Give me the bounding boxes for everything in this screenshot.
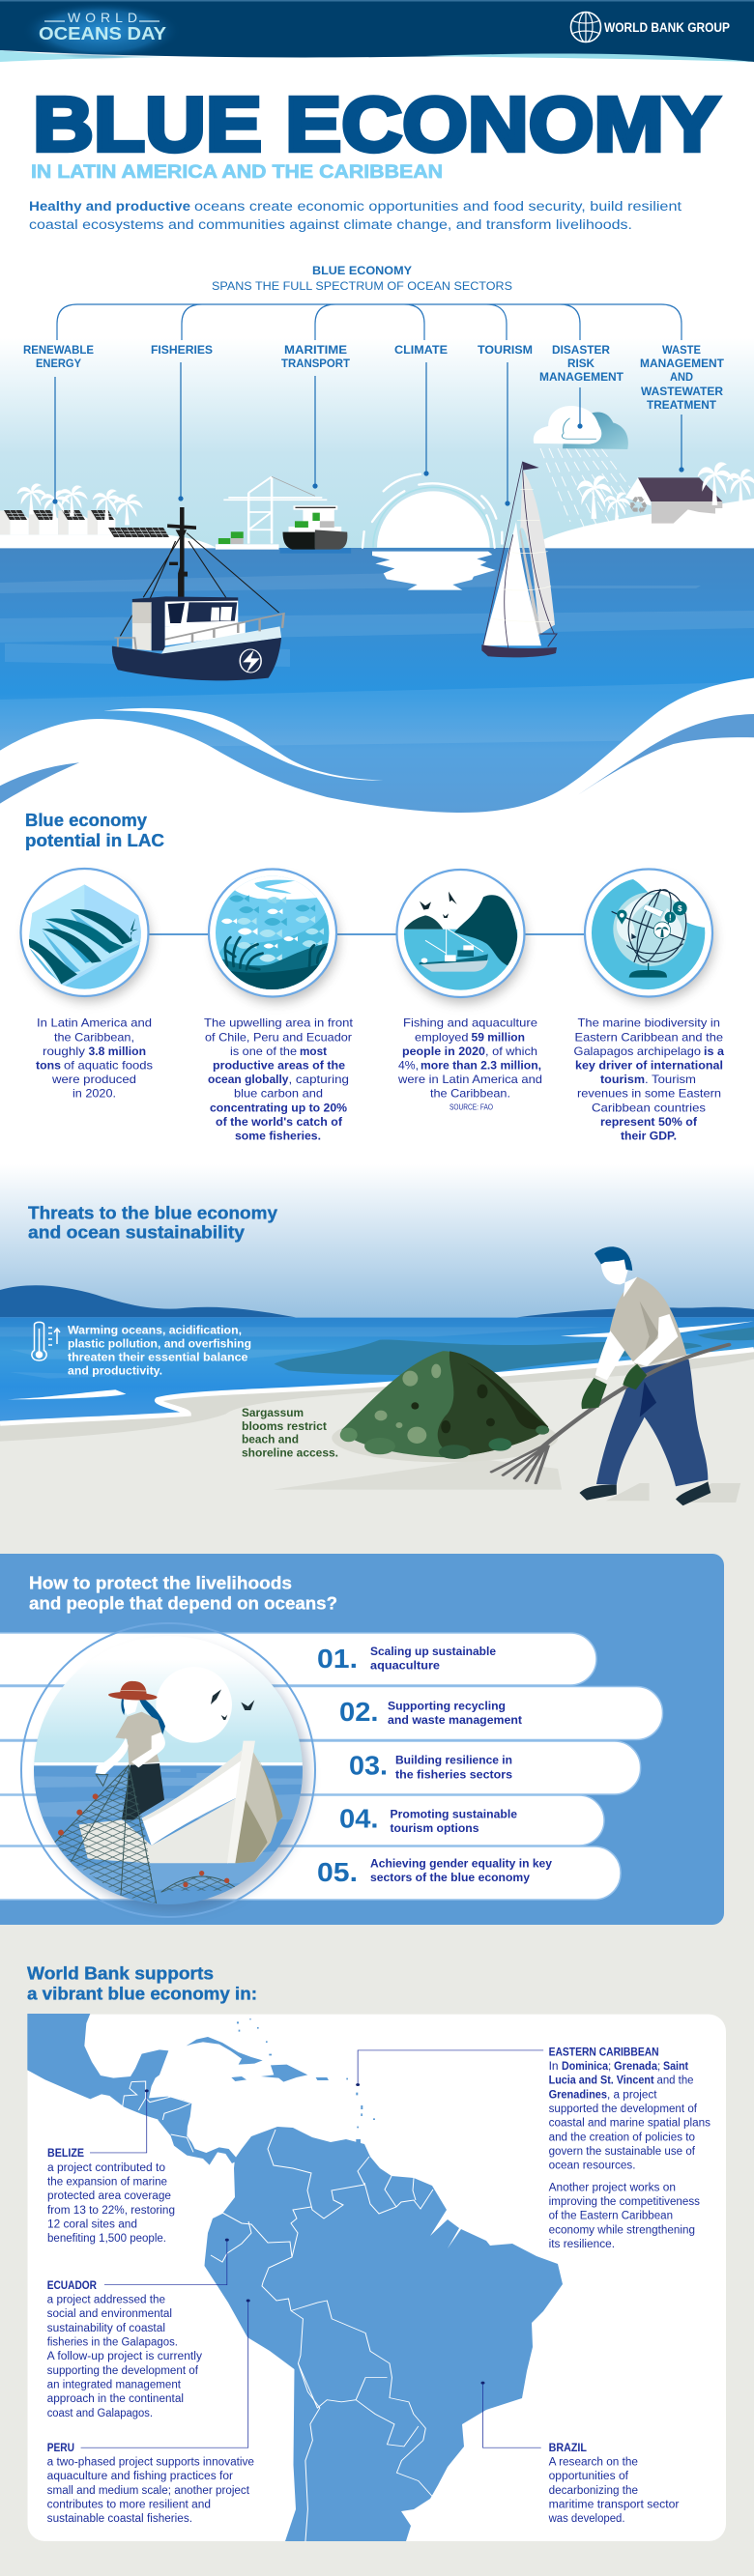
man raking seaweed bbox=[491, 1246, 740, 1505]
text: Belize: BELIZE bbox=[47, 2148, 84, 2160]
left beach and houses bbox=[0, 510, 217, 548]
text: Eastern Caribbean: Grenadines bbox=[549, 2089, 607, 2101]
sargassum text: shoreline access. bbox=[242, 1445, 338, 1459]
option 02: Supporting recycling bbox=[388, 1701, 506, 1712]
text: Peru: aquaculture and fishing practices for bbox=[47, 2471, 233, 2482]
port crane bbox=[223, 476, 327, 544]
option 01: aquaculture bbox=[370, 1661, 440, 1673]
option 01 bbox=[317, 1644, 496, 1674]
boat bbox=[79, 1741, 283, 1863]
sector labels bbox=[23, 345, 724, 412]
text: Belize: 12 coral sites and bbox=[47, 2218, 137, 2230]
text: Eastern Caribbean: Grenada bbox=[614, 2061, 658, 2073]
text: Ecuador: coast and Galapagos. bbox=[47, 2408, 153, 2419]
text: Peru: PERU bbox=[47, 2443, 74, 2454]
text: Eastern Caribbean bbox=[549, 2046, 710, 2250]
text: Brazil: BRAZIL bbox=[549, 2443, 587, 2454]
text: Eastern Caribbean: EASTERN CARIBBEAN bbox=[549, 2046, 659, 2058]
palm trees bbox=[17, 463, 754, 525]
heading: potential: Blue economy bbox=[25, 811, 147, 830]
stat text: aquatic foods: in 2020. bbox=[72, 1087, 116, 1101]
sector labels: AND bbox=[670, 372, 693, 384]
threats text: plastic pollution, and overfishing bbox=[68, 1337, 251, 1351]
stat text: upwelling: most bbox=[300, 1045, 327, 1058]
text: Peru: a two-phased project supports innovative bbox=[47, 2456, 254, 2468]
heading: World Bank: World Bank supports bbox=[27, 1964, 214, 1984]
neck and face bbox=[601, 1259, 637, 1298]
ring bbox=[21, 1623, 315, 1917]
text: Eastern Caribbean: , a project bbox=[607, 2089, 657, 2101]
text: Ecuador: an integrated management bbox=[47, 2379, 182, 2390]
stat text: upwelling: some fisheries. bbox=[235, 1130, 321, 1143]
stat text: tourism bbox=[574, 1016, 724, 1143]
map: Mexico and Central America bbox=[27, 2014, 375, 2165]
text: Brazil: A research on the bbox=[549, 2456, 638, 2468]
title: BLUE ECONOMY bbox=[33, 81, 720, 167]
shoreline and coastal illustration bbox=[0, 476, 754, 554]
stat text: tourism: their GDP. bbox=[621, 1130, 677, 1143]
logo: World Oceans Day: WORLD bbox=[68, 10, 137, 25]
map: country borders bbox=[123, 2081, 433, 2541]
sector labels: FISHERIES bbox=[151, 345, 213, 357]
circle 2: marine life bbox=[209, 870, 338, 1002]
text: Belize: the expansion of marine bbox=[47, 2176, 167, 2188]
map: South America bbox=[205, 2127, 563, 2541]
sector heading bbox=[212, 264, 512, 293]
stat text: aquatic foods: 3.8 million bbox=[89, 1045, 146, 1058]
text: Eastern Caribbean: In bbox=[549, 2061, 559, 2073]
text: Eastern Caribbean: supported the development of bbox=[549, 2104, 698, 2115]
option 03: the fisheries sectors bbox=[395, 1769, 512, 1781]
threats text: and productivity. bbox=[68, 1363, 162, 1377]
stat text: tourism: Caribbean countries bbox=[592, 1101, 706, 1114]
lower page background bbox=[0, 1449, 754, 2576]
fishing boat bbox=[112, 507, 284, 680]
text: Eastern Caribbean: and the creation of policies to bbox=[549, 2132, 695, 2143]
sector labels: WASTEWATER bbox=[641, 386, 724, 398]
stat text: aquatic foods: In Latin America and bbox=[37, 1016, 152, 1030]
circle 1: fish bbox=[21, 869, 150, 1001]
option 04: 04. bbox=[339, 1804, 379, 1834]
sector labels: CLIMATE bbox=[394, 345, 448, 357]
stat text: employment: employed bbox=[415, 1030, 468, 1044]
heading: World Bank: a vibrant blue economy in: bbox=[27, 1985, 257, 2004]
sector heading: BLUE ECONOMY bbox=[312, 264, 412, 277]
option 05 bbox=[317, 1857, 553, 1887]
panel: how to protect bbox=[0, 1554, 724, 1925]
right hill bbox=[543, 499, 754, 548]
intro text: Healthy and productive bbox=[29, 199, 191, 214]
text: Belize bbox=[47, 2148, 175, 2245]
logo: World Bank Group: WORLD BANK GROUP bbox=[604, 20, 730, 35]
sector labels: TREATMENT bbox=[647, 400, 716, 412]
stat text: aquatic foods bbox=[36, 1016, 153, 1101]
intro text: oceans create economic opportunities and food security, build resilient bbox=[194, 199, 682, 214]
text: Eastern Caribbean: govern the sustainable use of bbox=[549, 2146, 696, 2158]
illustration: woman with net bbox=[29, 1633, 309, 1910]
pants bbox=[596, 1360, 708, 1486]
text: Peru bbox=[47, 2443, 254, 2525]
sector labels: ENERGY bbox=[36, 358, 81, 370]
text: Brazil bbox=[548, 2443, 680, 2525]
text: Brazil: was developed. bbox=[548, 2513, 624, 2525]
heading: potential bbox=[25, 811, 164, 850]
stat text: aquatic foods: tons bbox=[36, 1058, 61, 1072]
text: Peru: small and medium scale; another project bbox=[47, 2485, 250, 2497]
source note: SOURCE: FAO bbox=[450, 1103, 493, 1112]
connector line bbox=[145, 933, 599, 935]
text: Ecuador: approach in the continental bbox=[47, 2393, 184, 2405]
white wave bbox=[0, 678, 754, 853]
circle 4: tourism globe: ! bbox=[669, 913, 672, 923]
cargo ship bbox=[280, 505, 351, 554]
option 01: 01. bbox=[317, 1644, 358, 1674]
beach scene bbox=[0, 1285, 754, 1556]
stat text: employment bbox=[397, 1016, 542, 1112]
sector labels: RENEWABLE bbox=[23, 345, 94, 357]
quay and containers bbox=[216, 531, 279, 550]
seaweed pile bbox=[332, 1351, 558, 1462]
circle 3: fishing employment bbox=[396, 870, 526, 1003]
stat text: employment: Fishing and aquaculture bbox=[403, 1016, 537, 1030]
shoes bbox=[579, 1481, 710, 1505]
sector labels: DISASTER bbox=[552, 345, 611, 357]
stat text: tourism: is a bbox=[704, 1045, 724, 1058]
text: Eastern Caribbean: economy while strengthening bbox=[549, 2224, 695, 2236]
stat text: employment: 4%, bbox=[398, 1058, 419, 1072]
sector labels: TRANSPORT bbox=[281, 358, 350, 370]
text: Eastern Caribbean: ; bbox=[657, 2061, 660, 2073]
sector labels: MANAGEMENT bbox=[539, 372, 624, 384]
solar panels bbox=[4, 510, 169, 537]
stat text: upwelling: of the world's catch of bbox=[216, 1115, 343, 1129]
stat text: upwelling: The upwelling area in front bbox=[204, 1016, 354, 1030]
callout dots bbox=[145, 2083, 484, 2385]
heading: How to protect the livelihoods bbox=[29, 1574, 292, 1593]
rain bbox=[540, 448, 630, 527]
stat text: tourism: represent 50% of bbox=[600, 1115, 698, 1129]
text: Ecuador: social and environmental bbox=[47, 2308, 172, 2320]
option 02 bbox=[339, 1697, 522, 1727]
stat text: upwelling: , capturing bbox=[288, 1073, 349, 1086]
icon: recycling symbol: ♻ bbox=[627, 492, 649, 519]
sector labels: MANAGEMENT bbox=[640, 358, 724, 370]
text: Peru: contributes to more resilient and bbox=[47, 2499, 211, 2510]
circle 4: tourism globe: $ bbox=[678, 904, 682, 913]
sargassum text: Sargassum bbox=[242, 1406, 304, 1419]
text: Eastern Caribbean: Lucia and St. Vincent bbox=[549, 2075, 654, 2087]
text: Peru: sustainable coastal fisheries. bbox=[47, 2513, 192, 2525]
text: Ecuador: fisheries in the Galapagos. bbox=[47, 2336, 178, 2348]
mountains bbox=[0, 1285, 754, 1317]
option 01: Scaling up sustainable bbox=[370, 1646, 496, 1658]
option 05: 05. bbox=[317, 1857, 358, 1887]
option 05: Achieving gender equality in key bbox=[370, 1858, 553, 1870]
subtitle: IN LATIN AMERICA AND THE CARIBBEAN bbox=[31, 161, 443, 183]
text: Eastern Caribbean: ; bbox=[608, 2061, 611, 2073]
icon: thermometer bbox=[32, 1322, 60, 1360]
stat text: upwelling: ocean globally bbox=[208, 1073, 289, 1086]
text: Eastern Caribbean: ocean resources. bbox=[549, 2161, 636, 2172]
text: Eastern Caribbean: coastal and marine spatial plans bbox=[549, 2118, 710, 2130]
option 04: Promoting sustainable bbox=[391, 1809, 517, 1820]
text: Eastern Caribbean: Dominica bbox=[562, 2061, 609, 2073]
stat text: employment: were in Latin America and bbox=[397, 1073, 542, 1086]
header banner bbox=[0, 0, 754, 62]
stat text: tourism: The marine biodiversity in bbox=[578, 1016, 720, 1030]
heading: World Bank bbox=[27, 1964, 257, 2004]
stat text: upwelling: productive areas of the bbox=[213, 1058, 345, 1072]
stat text: employment: people in 2020 bbox=[402, 1045, 485, 1058]
heading bbox=[29, 1574, 337, 1614]
stat text: tourism: key driver of international bbox=[575, 1058, 723, 1072]
stat text: aquatic foods: the Caribbean, bbox=[54, 1030, 134, 1044]
heading: potential: potential in LAC bbox=[25, 831, 164, 850]
sargassum text: beach and bbox=[242, 1433, 299, 1446]
stat text: tourism: Eastern Caribbean and the bbox=[574, 1030, 723, 1044]
cloud bbox=[534, 406, 628, 449]
stat text: aquatic foods: were produced bbox=[51, 1073, 136, 1086]
text: Ecuador: ECUADOR bbox=[47, 2280, 98, 2292]
stat text: tourism: Galapagos archipelago bbox=[574, 1045, 701, 1058]
beach shadow bbox=[274, 1459, 562, 1490]
callout lines bbox=[81, 2050, 543, 2447]
text: Ecuador: A follow-up project is currently bbox=[47, 2351, 202, 2362]
hair bbox=[594, 1246, 632, 1271]
threats text: Warming oceans, acidification, bbox=[68, 1324, 242, 1337]
threats heading: and ocean sustainability bbox=[28, 1223, 245, 1243]
woman bbox=[96, 1681, 165, 1819]
text: Ecuador: sustainability of coastal bbox=[47, 2323, 165, 2334]
text: Ecuador bbox=[47, 2280, 202, 2419]
bracket connecting sectors bbox=[57, 304, 682, 340]
logo: World Oceans Day bbox=[22, 2, 181, 60]
sky bbox=[0, 338, 754, 549]
stat text: upwelling: blue carbon and bbox=[234, 1087, 323, 1101]
option 04 bbox=[339, 1804, 517, 1835]
logo: World Oceans Day: OCEANS DAY bbox=[39, 24, 166, 43]
text: Eastern Caribbean: and the bbox=[657, 2075, 694, 2087]
foam bbox=[0, 1350, 754, 1423]
gloves bbox=[582, 1364, 647, 1409]
option 03 bbox=[349, 1750, 512, 1781]
option 02: and waste management bbox=[388, 1715, 522, 1727]
stat text: tourism: . Tourism bbox=[645, 1073, 696, 1086]
text: Brazil: decarbonizing the bbox=[549, 2485, 638, 2497]
algae patch bbox=[275, 1339, 702, 1375]
option 04: tourism options bbox=[391, 1823, 479, 1835]
rake bbox=[491, 1345, 729, 1483]
text: Eastern Caribbean: its resilience. bbox=[549, 2239, 615, 2250]
text: Eastern Caribbean: Another project works on bbox=[549, 2182, 676, 2193]
text: Belize: a project contributed to bbox=[47, 2162, 165, 2174]
stat text: employment: 59 million bbox=[472, 1030, 525, 1044]
text: Eastern Caribbean: improving the competitiveness bbox=[549, 2196, 700, 2208]
text: Ecuador: supporting the development of bbox=[47, 2365, 199, 2377]
sailboat bbox=[481, 462, 557, 657]
panel: map bbox=[27, 2014, 726, 2541]
option 02: 02. bbox=[339, 1697, 379, 1727]
stat text: upwelling: of Chile, Peru and Ecuador bbox=[205, 1030, 352, 1044]
stat text: employment: , of which bbox=[485, 1045, 537, 1058]
text: Brazil: opportunities of bbox=[549, 2471, 629, 2482]
left arm bbox=[595, 1327, 625, 1380]
sector labels: WASTE bbox=[662, 345, 701, 357]
right arm bbox=[632, 1314, 678, 1366]
sector labels: RISK bbox=[567, 358, 595, 370]
threats text bbox=[68, 1324, 251, 1377]
threats background sky bbox=[0, 1164, 754, 1317]
sun, reflection and house bbox=[362, 474, 722, 590]
heading: and people that depend on oceans? bbox=[29, 1594, 337, 1614]
sea bbox=[0, 548, 754, 838]
text: Belize: from 13 to 22%, restoring bbox=[47, 2205, 175, 2217]
option 03: Building resilience in bbox=[395, 1756, 512, 1767]
sea band bbox=[0, 1317, 754, 1433]
threats heading: Threats to the blue economy bbox=[28, 1204, 277, 1223]
text: Eastern Caribbean: of the Eastern Caribbean bbox=[549, 2211, 673, 2222]
stat text: aquatic foods: of aquatic foods bbox=[64, 1058, 153, 1072]
house bbox=[625, 477, 722, 524]
circle shadow bbox=[42, 1645, 308, 1911]
sector labels: MARITIME bbox=[284, 345, 347, 357]
text: Belize: benefiting 1,500 people. bbox=[47, 2233, 166, 2245]
sun bbox=[362, 474, 502, 590]
stat text: upwelling: is one of the bbox=[230, 1045, 297, 1058]
intro text bbox=[29, 199, 682, 232]
threats heading bbox=[28, 1204, 277, 1243]
intro text: coastal ecosystems and communities against climate change, and transform livelihoods. bbox=[29, 217, 632, 232]
sector leader lines bbox=[53, 362, 683, 505]
stat text: employment: the Caribbean. bbox=[430, 1087, 510, 1101]
text: Brazil: maritime transport sector bbox=[549, 2499, 680, 2510]
text: Belize: protected area coverage bbox=[47, 2190, 171, 2202]
option bars bbox=[0, 1633, 663, 1900]
sector heading: SPANS THE FULL SPECTRUM OF OCEAN SECTORS bbox=[212, 279, 512, 293]
threats text: threaten their essential balance bbox=[68, 1351, 248, 1364]
sector labels: TOURISM bbox=[478, 345, 533, 357]
text: Ecuador: a project addressed the bbox=[47, 2294, 165, 2305]
stat text: employment: more than 2.3 million, bbox=[420, 1058, 541, 1072]
option 05: sectors of the blue economy bbox=[370, 1873, 531, 1884]
stat text: upwelling: concentrating up to 20% bbox=[210, 1101, 347, 1114]
stat text: aquatic foods: roughly bbox=[43, 1045, 85, 1058]
stat text: upwelling bbox=[204, 1016, 354, 1143]
logo: World Bank Group bbox=[570, 12, 730, 43]
sargassum text: blooms restrict bbox=[242, 1419, 327, 1433]
birds bbox=[211, 1689, 254, 1720]
text: Eastern Caribbean: Saint bbox=[663, 2061, 688, 2073]
net bbox=[55, 1765, 235, 1903]
shirt bbox=[610, 1277, 686, 1367]
option 03: 03. bbox=[349, 1750, 388, 1780]
stat text: tourism: revenues in some Eastern bbox=[577, 1087, 721, 1101]
stat text: tourism: tourism bbox=[600, 1073, 645, 1086]
sargassum text bbox=[242, 1406, 338, 1459]
sand bbox=[0, 1350, 754, 1556]
circle 4: tourism globe bbox=[585, 870, 713, 1001]
